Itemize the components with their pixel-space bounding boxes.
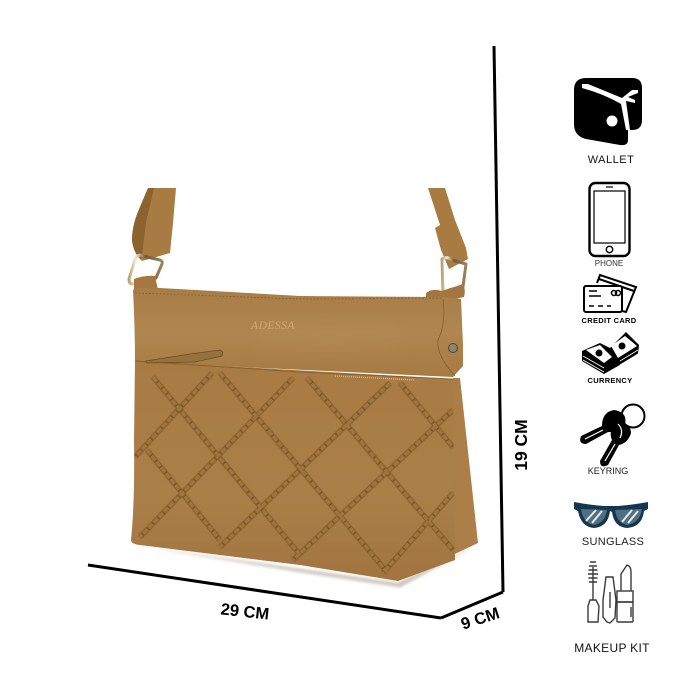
zip pull <box>146 350 223 363</box>
side panel <box>398 378 478 581</box>
upper body <box>133 288 463 377</box>
label: makeup kit: MAKEUP KIT <box>574 641 650 655</box>
label: keyring: KEYRING <box>588 466 628 476</box>
icon: phone <box>590 183 630 256</box>
side tab seam <box>438 299 455 376</box>
label: credit card: CREDIT CARD <box>582 316 637 325</box>
top stitching <box>135 293 442 299</box>
dimension line: depth <box>441 592 503 618</box>
dimension line: height <box>494 46 503 592</box>
right strap <box>428 188 468 269</box>
left strap <box>132 188 176 261</box>
right ring <box>442 258 466 291</box>
lower pocket <box>131 361 455 581</box>
left ring <box>129 255 162 284</box>
label: 29 CM: 29 CM <box>220 601 270 623</box>
icon: keyring <box>580 404 644 466</box>
right tab <box>426 284 465 301</box>
leather mottling <box>250 321 410 349</box>
icon: sunglasses <box>574 502 648 528</box>
handbag <box>129 188 478 587</box>
left tab <box>134 276 158 291</box>
icon: credit card <box>584 275 636 312</box>
label: 9 CM: 9 CM <box>459 604 502 634</box>
dimension line: width <box>88 565 441 618</box>
icon: wallet <box>574 78 642 145</box>
label: phone: PHONE <box>595 259 623 268</box>
label: currency: CURRENCY <box>588 376 632 385</box>
label: wallet: WALLET <box>588 154 634 166</box>
pocket top edge <box>135 361 453 379</box>
icon: currency <box>582 332 639 374</box>
rivet <box>448 344 458 352</box>
bag shadow <box>134 545 476 587</box>
zip <box>335 376 415 380</box>
brand text: ADESSA <box>250 320 295 332</box>
label: sunglass: SUNGLASS <box>582 536 644 548</box>
icon: makeup kit <box>588 562 633 623</box>
label: 19 CM: 19 CM <box>511 419 531 471</box>
stitched lattice <box>135 373 453 573</box>
